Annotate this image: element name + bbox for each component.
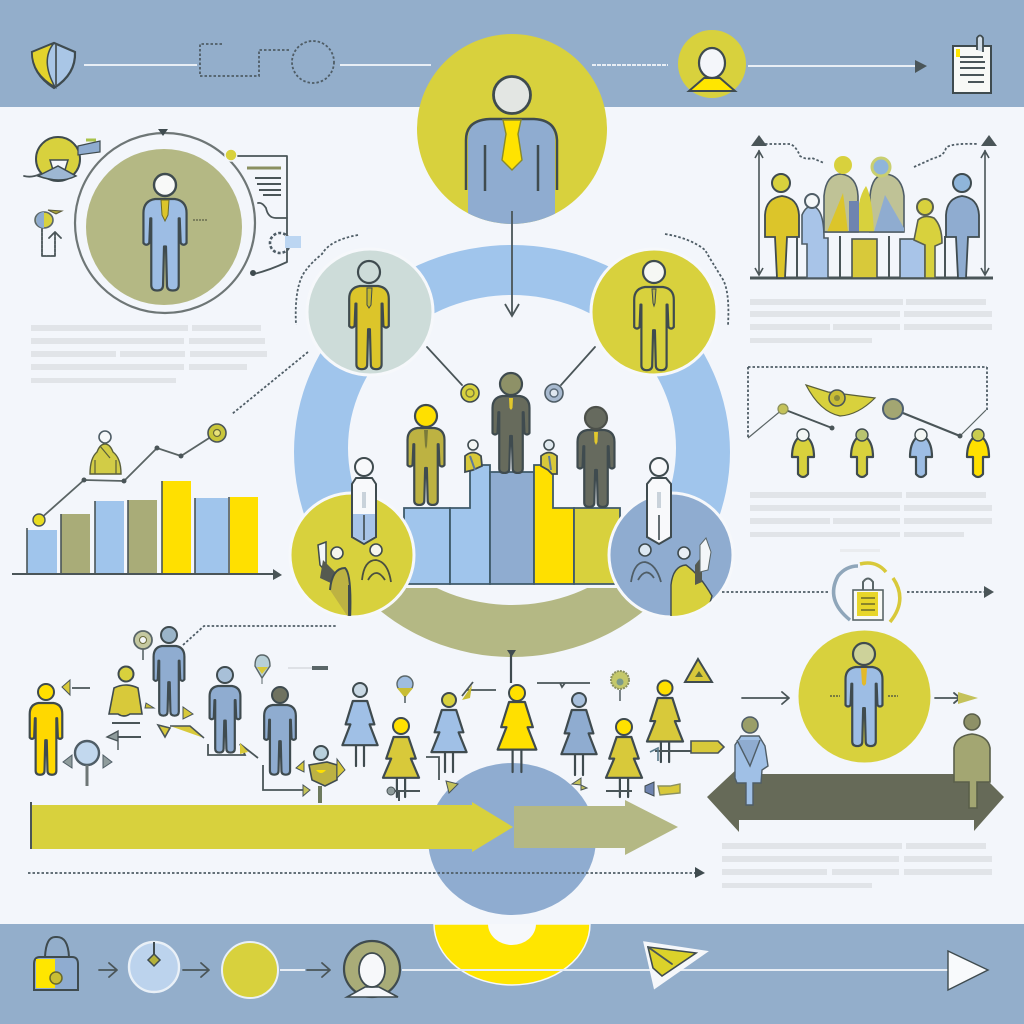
pin [134,631,152,660]
process arrow: olive [514,800,678,855]
column: yellow [852,239,877,278]
column: blue [900,239,925,278]
arrow out of circle [935,692,978,704]
dashed squiggles [765,144,824,163]
podium people [408,373,614,507]
eye shape [806,385,875,416]
hooded figure [90,431,121,474]
icon: timer circle [129,942,179,992]
down arrow [505,211,519,316]
ring: olive segment [381,588,643,657]
arrow into circle [742,692,789,704]
connector marks [145,703,154,708]
avatar ring [344,941,400,997]
person: dark centre [493,373,529,473]
balloon pin [255,655,270,684]
blue ellipse [428,763,596,915]
icon: tape badge [24,137,100,181]
person: hooded pair [824,156,904,232]
upper-right person circle [591,249,717,375]
yellow half ring [434,924,590,985]
double arrow: dark [707,767,1004,832]
top person circle [417,34,607,226]
corner markers [751,135,767,146]
magnifier [63,741,112,786]
people chart: top right [750,135,997,278]
person: blue tall [154,626,336,716]
note card with connectors [238,156,301,276]
upper-left person circle [307,249,433,375]
person: small left [465,440,482,472]
person: dress blue [342,683,378,766]
elbow connector [263,765,304,790]
person [143,174,187,291]
arrow [280,969,305,971]
ring: blue segments [294,245,730,514]
yellow dot [225,149,237,161]
connector line to end arrow [402,969,950,971]
end arrow [948,951,988,990]
pointer left [62,680,90,695]
person: blue [210,667,240,753]
dashed connector [200,44,290,76]
tall white figure [647,458,671,544]
person: dark right [578,407,614,507]
yellow circle [222,942,278,998]
right feature circle [798,630,930,762]
text block: left [31,325,267,383]
warning triangle [685,659,712,682]
text block: bottom right [722,843,992,888]
person: yellow child [914,199,942,278]
marker [158,129,168,136]
podium bars [404,465,620,584]
top band [0,0,1024,107]
icon: paper plane [645,943,705,987]
figure: yellow [792,429,814,477]
trend markers [82,478,86,482]
figure: bright yellow [967,429,989,477]
trend line [39,433,217,520]
figure on arrow: right [954,714,990,808]
dashed line chart: right [748,367,989,477]
figure: yellow [851,429,873,477]
chart line [748,409,783,438]
person: blue right [946,174,979,278]
person: bright yellow [498,685,536,772]
icon: cycle [834,563,900,622]
icon: bulb and return arrow [35,210,62,256]
text block: right middle [750,492,992,552]
person: half yellow [109,666,142,737]
person: dress yellow [383,718,419,797]
tag connector [650,741,724,761]
connector line middle [340,64,431,66]
bottom band [0,924,1024,1024]
person: dress blue [431,693,467,772]
person: dress blue [561,693,597,775]
avatar circle [678,30,746,98]
top-left feature circle [75,129,255,313]
small row icons and connectors [62,631,724,803]
person: blue small [802,194,828,278]
dashed arrow with cycle icon [722,563,994,622]
person: dress yellow [647,680,683,762]
person: dress yellow [606,719,642,797]
person: yellow left [765,174,799,278]
arrow [99,963,117,977]
connector line right [592,64,668,66]
flower pin [611,671,629,701]
bar edges [27,481,229,574]
arrow to document [748,60,927,73]
axis arrow [12,573,274,575]
chart dots [778,404,788,414]
columns [797,236,945,278]
people row [30,626,683,797]
arrow [307,963,330,977]
person: yellow [30,684,62,775]
connector line left [84,64,197,66]
person: blue dark head [264,687,296,775]
lower-right people circle [609,458,733,620]
lower-left people circle [290,458,414,620]
text block: right top [750,299,992,343]
connector dots [427,347,595,402]
figure: blue [910,429,932,477]
dashed callout curves [232,234,728,414]
tall white figure [352,458,376,544]
icon: shield [32,43,75,88]
bar chart: left [12,424,282,580]
process arrow: yellow [31,802,513,852]
axes [750,276,993,280]
person: small right [541,440,557,474]
figure on arrow: left [735,717,768,805]
tool icons [645,782,680,796]
icon: document [953,36,991,93]
person: yellow [408,405,444,505]
icon: lock [34,937,78,990]
dashed circle [292,41,334,83]
flower figure [296,746,345,803]
arrow [183,963,209,977]
dashed timeline arrow [28,867,705,878]
small mark [193,219,207,221]
bulb pin [397,676,413,703]
